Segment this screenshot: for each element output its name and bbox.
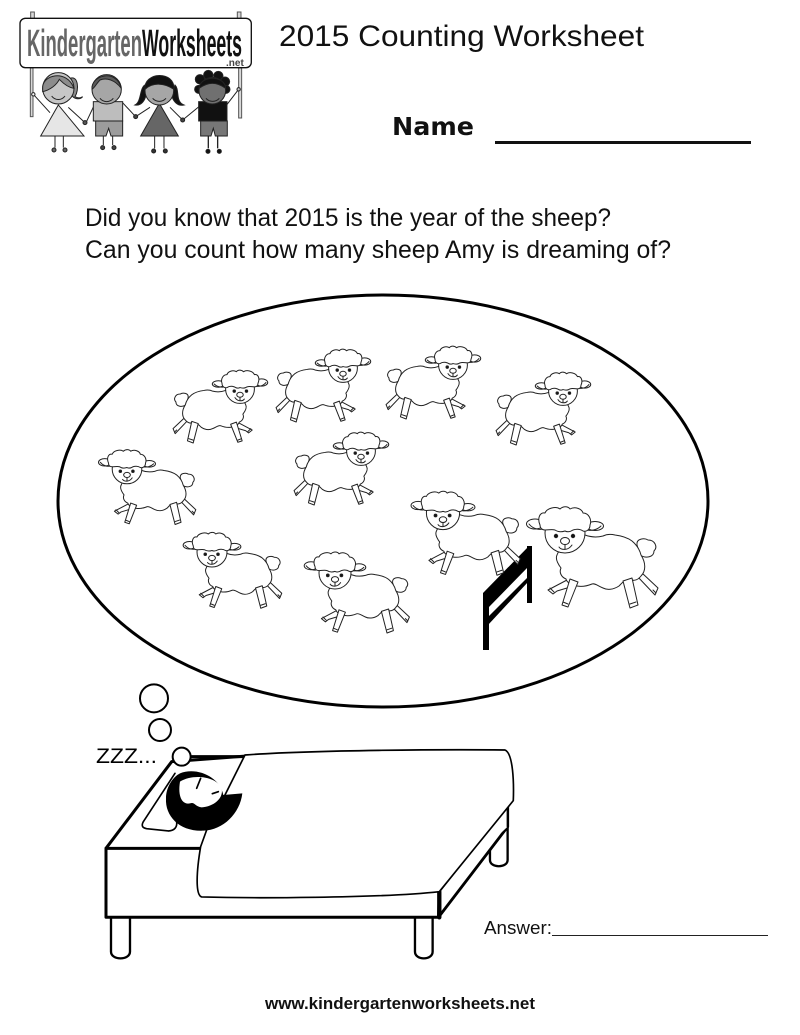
footer url: www.kindergartenworksheets.net — [264, 994, 535, 1013]
sheep 2 — [276, 349, 371, 422]
sheep 4 — [496, 372, 591, 445]
logo text: Kindergarten — [27, 23, 142, 65]
instructions: Did you know that 2015 is the year of the sheep? — [85, 204, 611, 232]
fence — [483, 546, 532, 650]
dream bubble — [58, 295, 708, 707]
instructions: Can you count how many sheep Amy is dreaming of? — [85, 236, 671, 264]
logo: Kindergarten Worksheets — [20, 12, 251, 153]
kid 3 — [134, 75, 184, 153]
blanket — [197, 750, 513, 898]
sleeping girl in bed — [106, 684, 513, 958]
logo text: .net — [226, 58, 244, 69]
answer field: Answer: — [484, 918, 552, 938]
sheep 1 — [173, 370, 268, 443]
sheep 10 — [526, 507, 658, 608]
hair — [166, 771, 242, 831]
head of bed edge — [190, 752, 245, 761]
sheep 6 — [99, 450, 196, 524]
sheep 3 — [386, 346, 481, 419]
face — [179, 777, 222, 807]
kid 2 — [83, 75, 136, 150]
text: Worksheets — [142, 23, 242, 65]
name field — [392, 112, 751, 144]
sheep 7 — [183, 532, 282, 608]
title: 2015 Counting Worksheet — [279, 20, 645, 53]
sheep 8 — [304, 552, 409, 633]
snore text: ZZZ... — [96, 745, 157, 768]
name field: Name — [392, 112, 474, 141]
kid 1 — [32, 73, 85, 152]
instructions — [85, 204, 671, 264]
sign posts — [30, 12, 242, 118]
sheep 5 — [294, 432, 389, 505]
thought bubbles — [140, 684, 191, 766]
kid 4 — [181, 70, 240, 153]
bed frame — [106, 756, 508, 958]
sign board — [20, 18, 251, 68]
pillow — [142, 773, 177, 831]
sheep 9 jumping fence — [411, 491, 520, 575]
